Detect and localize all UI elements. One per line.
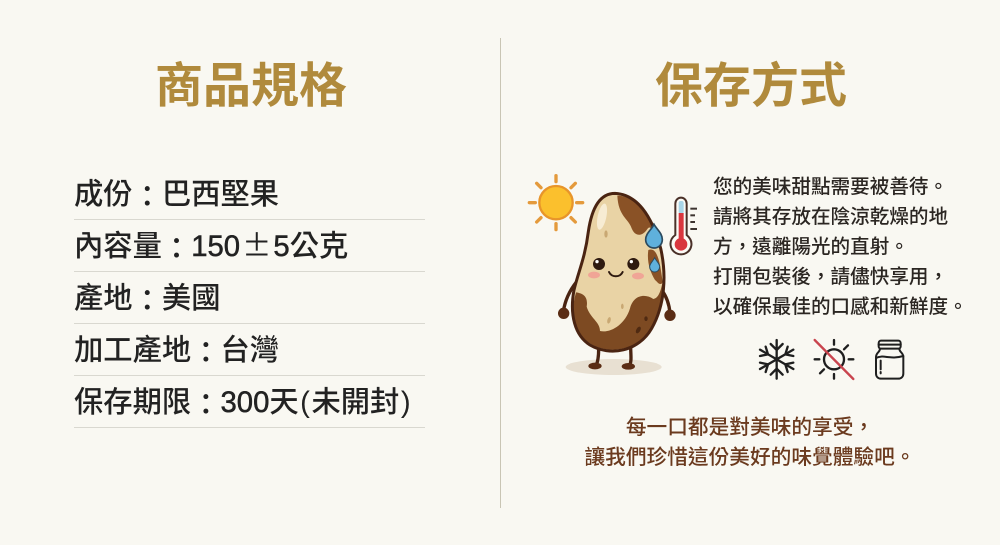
icon: snowflake	[760, 340, 793, 379]
closing message: 讓我們珍惜這份美好的味覺體驗吧。	[584, 446, 916, 469]
icon: sweat drops	[646, 224, 662, 272]
text block: storage instructions: 打開包裝後，請儘快享用，	[713, 266, 948, 288]
icon: thermometer	[671, 198, 697, 254]
icon: sealed jar	[876, 341, 903, 379]
panel: specification list	[74, 178, 425, 428]
spec: origin	[74, 272, 425, 324]
closing message: 每一口都是對美味的享受，	[626, 416, 874, 439]
spec: processing origin: 加工產地：台灣	[74, 334, 279, 370]
spec: net weight	[74, 220, 425, 272]
mascot legs and arms	[563, 282, 670, 366]
shadow	[566, 359, 662, 375]
icon: sun	[529, 176, 583, 230]
spec: ingredients: 成份：巴西堅果	[74, 178, 279, 214]
icon: no sunlight	[815, 340, 853, 379]
spec: origin: 產地：美國	[74, 282, 220, 318]
mascot body	[572, 193, 664, 351]
spec: net weight: 內容量：150±5公克	[74, 223, 348, 266]
closing message	[584, 416, 916, 469]
illustration: Brazil nut mascot with sun and thermometer	[528, 174, 697, 375]
spec: ingredients	[74, 168, 425, 220]
heading: storage method: 保存方式	[655, 60, 847, 113]
text block: storage instructions: 以確保最佳的口感和新鮮度。	[713, 296, 968, 318]
divider	[500, 38, 501, 508]
text block: storage instructions: 您的美味甜點需要被善待。	[713, 176, 948, 198]
spec: processing origin	[74, 324, 425, 376]
spec: shelf life: 保存期限：300天(未開封)	[74, 386, 411, 422]
text block: storage instructions	[713, 176, 968, 318]
mascot hands and feet	[558, 308, 676, 370]
text block: storage instructions: 請將其存放在陰涼乾燥的地	[713, 206, 948, 228]
spec: shelf life	[74, 376, 425, 428]
text block: storage instructions: 方，遠離陽光的直射。	[713, 236, 909, 258]
icon row: storage icons	[758, 338, 904, 380]
mascot face	[588, 258, 644, 279]
heading: product specs: 商品規格	[155, 60, 347, 113]
